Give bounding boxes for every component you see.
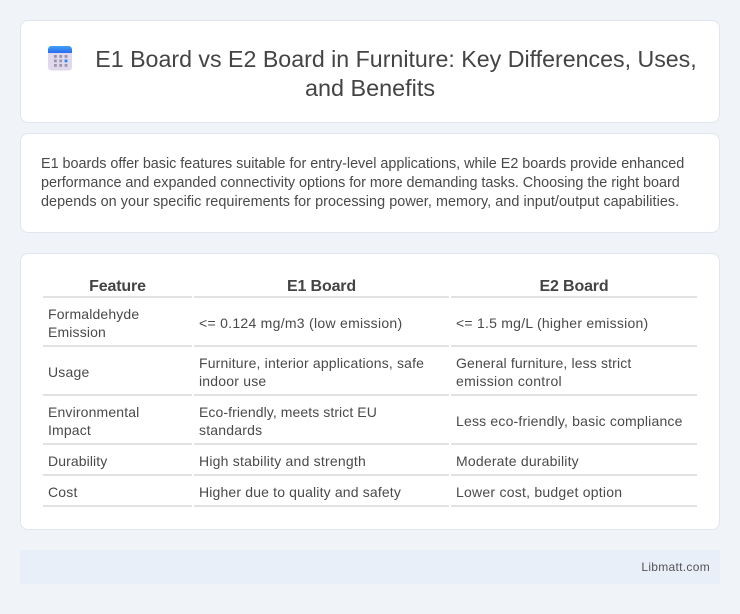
row: environmental impact: standards: [199, 422, 262, 438]
intro text: [41, 156, 684, 210]
intro text: E1 boards offer basic features suitable for entry-level applications, while E2 boards provide enhanced: [41, 156, 684, 172]
row: usage: emission control: [456, 373, 562, 389]
comparison table: [43, 278, 697, 507]
intro text: performance and expanded connectivity options for more demanding tasks. Choosing the right board: [41, 175, 680, 191]
row: environmental impact: [48, 404, 683, 438]
table header: Feature: [89, 278, 146, 295]
row: cost: [48, 484, 622, 500]
intro card: [20, 133, 720, 233]
table header: [89, 278, 609, 295]
table header: E1 Board: [287, 278, 356, 295]
row: environmental impact: Less eco-friendly, basic compliance: [456, 413, 683, 429]
row: formaldehyde emission: [48, 306, 648, 340]
icon: calendar: [48, 46, 72, 70]
row: usage: Usage: [48, 364, 89, 380]
row: durability: [48, 453, 579, 469]
row: cost: Lower cost, budget option: [456, 484, 622, 500]
row: durability: Moderate durability: [456, 453, 579, 469]
row: formaldehyde emission: <= 1.5 mg/L (higher emission): [456, 315, 648, 331]
footer credit: Libmatt.com: [641, 560, 710, 574]
row: cost: Cost: [48, 484, 78, 500]
title: E1 Board vs E2 Board in Furniture: Key Differences, Uses,: [95, 46, 697, 72]
row: usage: General furniture, less strict: [456, 355, 631, 371]
table header: E2 Board: [539, 278, 609, 295]
row: usage: indoor use: [199, 373, 266, 389]
row: usage: Furniture, interior applications, safe: [199, 355, 424, 371]
row: usage: [48, 355, 632, 389]
row: environmental impact: Impact: [48, 422, 91, 438]
row: formaldehyde emission: Emission: [48, 324, 106, 340]
title: and Benefits: [305, 75, 435, 101]
row: cost: Higher due to quality and safety: [199, 484, 401, 500]
title: [95, 46, 697, 101]
row: environmental impact: Environmental: [48, 404, 139, 420]
row: durability: High stability and strength: [199, 453, 366, 469]
title card: [20, 20, 720, 123]
intro text: depends on your specific requirements for processing power, memory, and input/output capabilities.: [41, 194, 679, 210]
table card: [20, 253, 720, 530]
row: formaldehyde emission: <= 0.124 mg/m3 (low emission): [199, 315, 402, 331]
row: durability: Durability: [48, 453, 107, 469]
footer: [20, 550, 720, 584]
row: formaldehyde emission: Formaldehyde: [48, 306, 139, 322]
row: environmental impact: Eco-friendly, meets strict EU: [199, 404, 377, 420]
